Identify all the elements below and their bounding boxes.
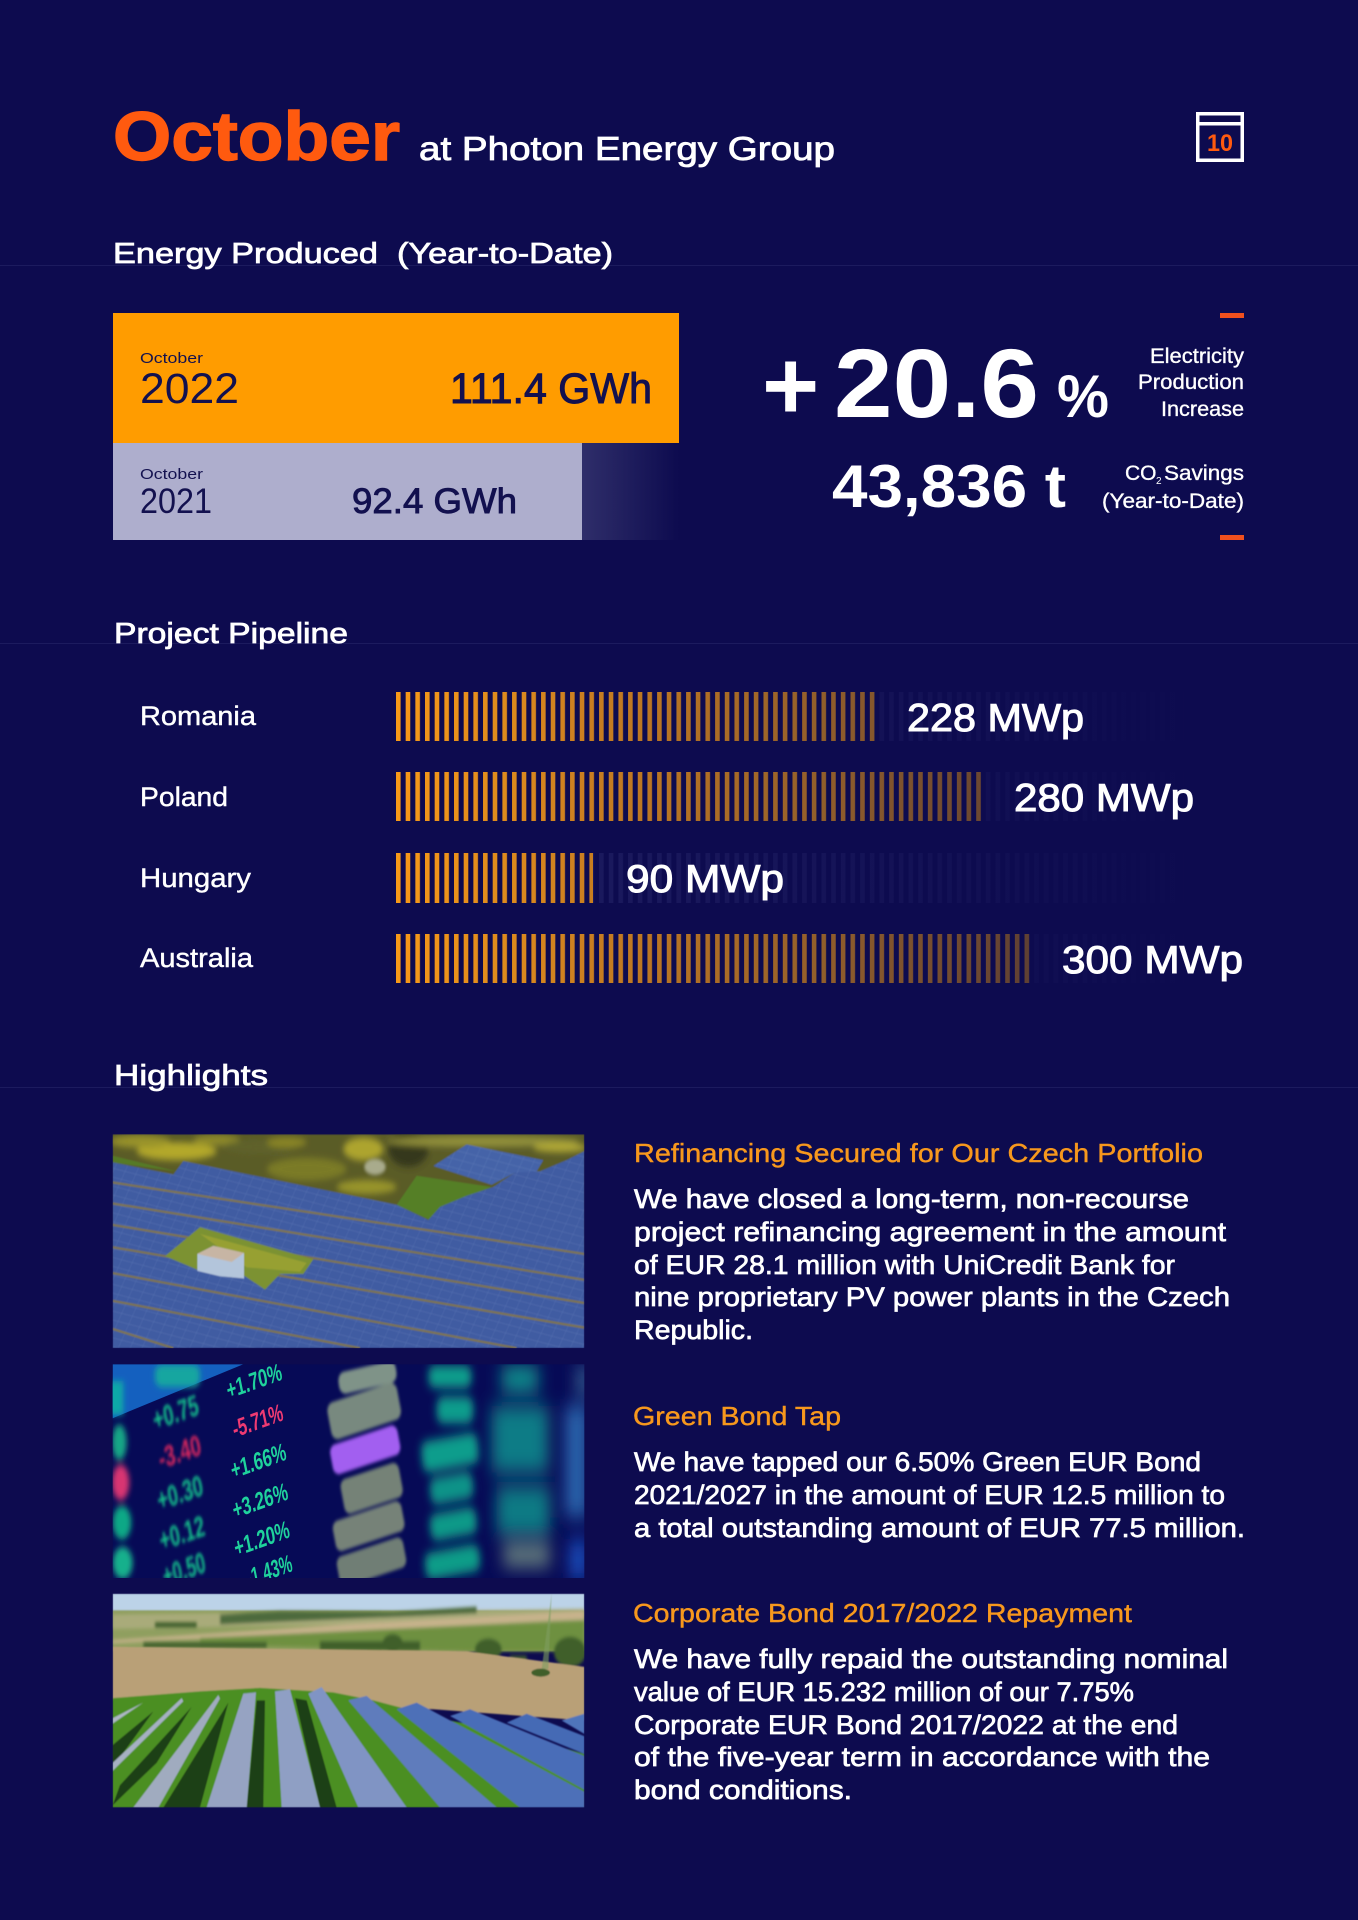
text block: refinancing body: project refinancing agreement in the amount [634,1217,1227,1247]
photo: solar farm with grey building [110,1131,587,1348]
text block: refinancing body: nine proprietary PV power plants in the Czech [634,1282,1230,1312]
photo: stock ticker screen: +0.12 [156,1509,207,1557]
heading: energy produced: Energy Produced (Year-to-Date) [113,238,613,270]
bar: October 2022: 111.4 GWh [450,365,652,413]
title: at Photon Energy Group [419,130,835,167]
title: October [113,98,400,175]
bar: October 2021 [113,443,679,540]
heading: project pipeline: Project Pipeline [114,618,348,650]
stat: CO2 savings: CO [1125,462,1156,485]
text block: corporate bond body: bond conditions. [634,1775,852,1805]
row: Australia: 300 MWp [1062,939,1243,982]
chart: project pipeline bars [140,692,1243,983]
photo: stock ticker screen: +3.26% [230,1477,290,1524]
panel: key statistics [762,313,1245,540]
row: Australia: Australia [140,943,254,973]
text block: green bond body: a total outstanding amount of EUR 77.5 million. [634,1513,1245,1543]
text block: corporate bond body: value of EUR 15.232 million of our 7.75% [634,1677,1134,1707]
text block: refinancing body: of EUR 28.1 million with UniCredit Bank for [634,1250,1175,1280]
text block: refinancing body: Republic. [634,1315,753,1345]
title [113,98,835,175]
stat: CO2 savings: (Year-to-Date) [1102,490,1244,513]
photo: stock ticker screen: +0.30 [154,1468,206,1517]
highlight: refinancing [634,1138,1230,1345]
row: Hungary: Hungary [140,863,252,893]
stat: electricity production increase: Electricity [1150,345,1245,368]
row: Romania [140,692,1190,741]
highlight: corporate bond repayment [633,1598,1228,1805]
stat: electricity production increase: Production [1138,371,1244,394]
bar: October 2022 [113,313,679,443]
panel: energy comparison bars [113,313,679,540]
stat: electricity production increase: Increase [1161,398,1244,421]
row: Hungary: 90 MWp [626,858,784,901]
row: Poland: Poland [140,782,228,812]
bar: October 2022: October [140,350,203,367]
stat: electricity production increase: 20.6 [834,329,1039,438]
text block: refinancing body [634,1184,1230,1345]
text block: green bond body: We have tapped our 6.50% Green EUR Bond [634,1447,1201,1477]
row: Poland: 280 MWp [1014,777,1194,820]
icon: calendar: 10 [1207,130,1233,157]
heading: highlights: Highlights [114,1060,268,1092]
photo: stock ticker screen: -3.40 [155,1428,204,1476]
text block: corporate bond body [634,1644,1228,1805]
text block: corporate bond body: We have fully repaid the outstanding nominal [634,1644,1228,1674]
text block: green bond body [634,1447,1245,1543]
row: Poland [140,772,1194,821]
highlight: refinancing: Refinancing Secured for Our Czech Portfolio [634,1138,1203,1168]
stat: CO2 savings: 43,836 t [832,453,1066,520]
photo: stock ticker screen: +1.66% [228,1437,289,1484]
photo: stock ticker screen: +1.20% [232,1515,292,1562]
photo: solar panels in fields [113,1593,586,1808]
text block: refinancing body: We have closed a long-term, non-recourse [634,1184,1189,1214]
photo: stock ticker screen: -5.71% [230,1398,286,1443]
stat: CO2 savings: Savings [1164,462,1244,485]
text block: corporate bond body: of the five-year term in accordance with the [634,1742,1210,1772]
photo: stock ticker screen [112,1364,584,1578]
stat: electricity production increase [762,329,1245,440]
photo: stock ticker screen: +0.50 [160,1545,208,1593]
icon: calendar [1197,114,1243,160]
highlight: corporate bond repayment: Corporate Bond 2017/2022 Repayment [633,1598,1133,1628]
bar: October 2021: 92.4 GWh [352,482,517,521]
text block: corporate bond body: Corporate EUR Bond 2017/2022 at the end [634,1710,1178,1740]
row: Romania: 228 MWp [907,697,1084,740]
stat: CO2 savings: 2 [1156,476,1162,487]
stat: electricity production increase: % [1057,363,1109,430]
bar: October 2021: October [140,466,203,483]
row: Australia [140,934,1243,983]
photo: stock ticker screen: -1.43% [244,1549,295,1592]
bar: October 2022: 2022 [140,365,239,413]
text block: green bond body: 2021/2027 in the amount of EUR 12.5 million to [634,1480,1225,1510]
row: Hungary [140,853,1190,903]
row: Romania: Romania [140,701,257,731]
highlight: green bond tap: Green Bond Tap [633,1401,841,1431]
stat: CO2 savings [832,453,1244,520]
bar: October 2021: 2021 [140,482,212,521]
highlight: green bond tap [633,1401,1245,1543]
stat: electricity production increase: + [762,330,819,440]
photo: stock ticker screen: +1.70% [224,1357,284,1404]
photo: stock ticker screen: +0.75 [150,1388,201,1437]
